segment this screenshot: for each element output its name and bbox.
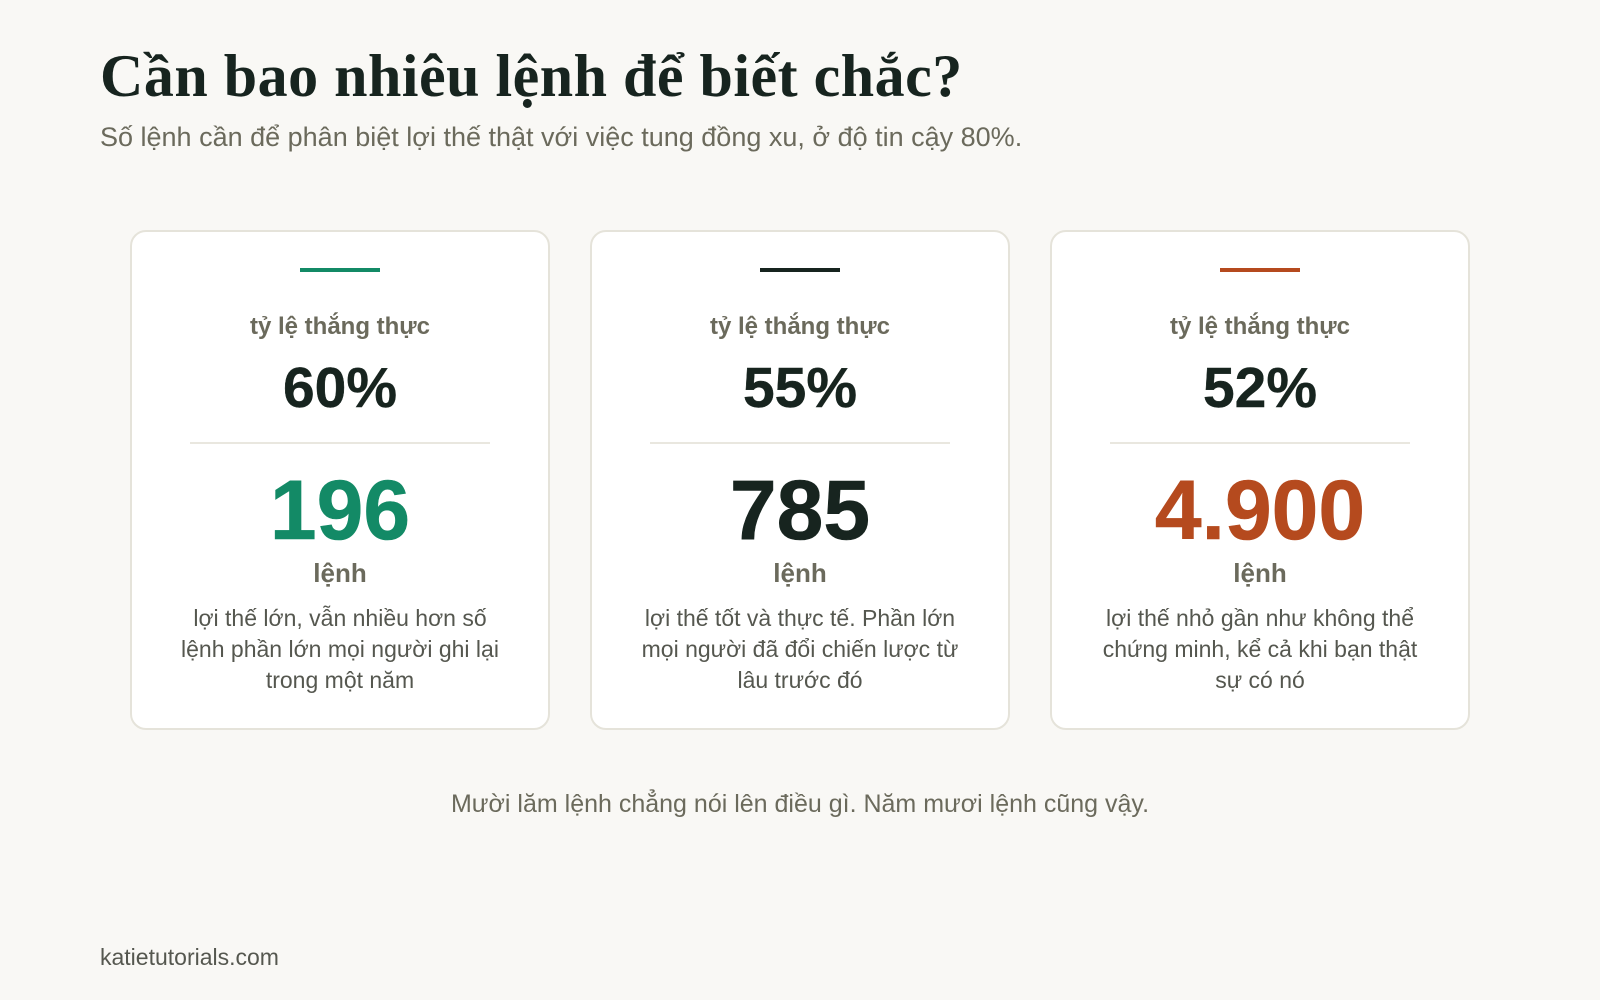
footer source: katietutorials.com — [100, 944, 279, 970]
label: win rate: tỷ lệ thắng thực — [710, 313, 890, 340]
trade count: 785 — [730, 463, 870, 557]
win rate value: 52% — [1203, 356, 1317, 420]
description: lệnh phần lớn mọi người ghi lại — [181, 636, 499, 662]
label: win rate: tỷ lệ thắng thực — [1170, 313, 1350, 340]
description — [181, 605, 499, 693]
description: sự có nó — [1215, 667, 1305, 693]
trade count: 196 — [270, 463, 410, 557]
unit label: lệnh — [1233, 558, 1287, 588]
description: trong một năm — [266, 667, 414, 693]
accent bar: dark — [760, 268, 840, 272]
title: Cần bao nhiêu lệnh để biết chắc? — [100, 43, 963, 109]
trade count: 4.900 — [1155, 463, 1365, 557]
description: lợi thế nhỏ gần như không thể — [1106, 605, 1414, 631]
description: lợi thế tốt và thực tế. Phần lớn — [645, 605, 955, 631]
accent bar: rust — [1220, 268, 1300, 272]
closing note: Mười lăm lệnh chẳng nói lên điều gì. Năm mươi lệnh cũng vậy. — [451, 790, 1149, 818]
panel: 60% win rate — [130, 230, 550, 730]
label: win rate: tỷ lệ thắng thực — [250, 313, 430, 340]
description — [642, 605, 958, 693]
unit label: lệnh — [313, 558, 367, 588]
description: chứng minh, kể cả khi bạn thật — [1103, 636, 1417, 662]
unit label: lệnh — [773, 558, 827, 588]
description — [1103, 605, 1418, 693]
accent bar: green — [300, 268, 380, 272]
subtitle: Số lệnh cần để phân biệt lợi thế thật với việc tung đồng xu, ở độ tin cậy 80%. — [100, 122, 1022, 152]
description: lợi thế lớn, vẫn nhiều hơn số — [193, 605, 487, 631]
panel: 55% win rate — [590, 230, 1010, 730]
description: lâu trước đó — [737, 667, 863, 693]
panel: 52% win rate — [1050, 230, 1470, 730]
win rate value: 60% — [283, 356, 397, 420]
description: mọi người đã đổi chiến lược từ — [642, 636, 958, 662]
win rate value: 55% — [743, 356, 857, 420]
